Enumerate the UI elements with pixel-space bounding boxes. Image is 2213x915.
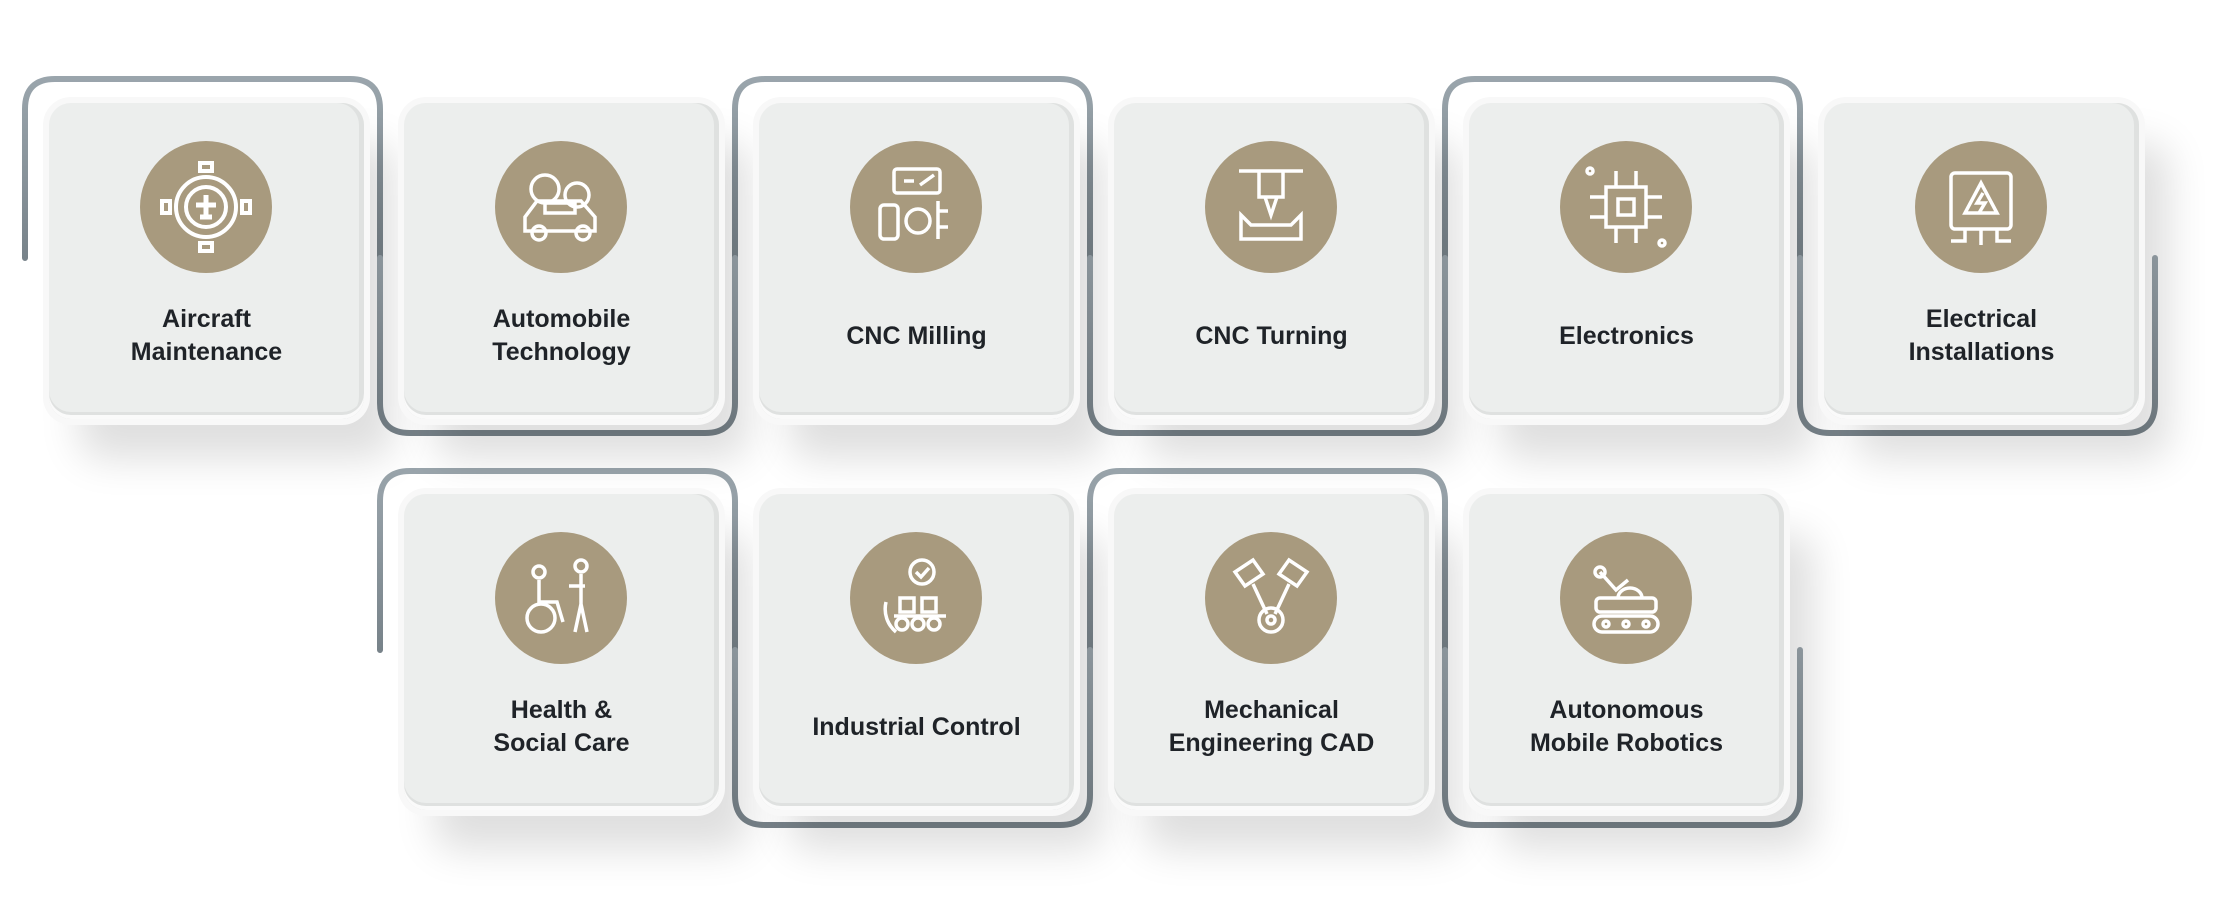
- icon: gear with check and boxes: [850, 532, 982, 664]
- label: Autonomous: [1549, 696, 1704, 724]
- label: Aircraft: [162, 305, 251, 333]
- icon: pistons: [1205, 532, 1337, 664]
- label: Electrical: [1926, 305, 2037, 333]
- label: CNC Turning: [1195, 322, 1348, 350]
- icon: electrical box: [1915, 141, 2047, 273]
- card: Mechanical Engineering CAD: [1114, 494, 1429, 810]
- icon: turning tool: [1205, 141, 1337, 273]
- label: Automobile: [493, 305, 630, 333]
- label: [492, 305, 631, 366]
- icon: milling: [850, 141, 982, 273]
- label: [1909, 305, 2054, 366]
- label: [1530, 696, 1723, 757]
- label: Maintenance: [131, 338, 282, 366]
- icon: chip: [1560, 141, 1692, 273]
- icon: wheelchair and carer: [495, 532, 627, 664]
- label: CNC Milling: [846, 322, 987, 350]
- card: Electronics: [1469, 103, 1784, 419]
- icon: robot arm on conveyor: [1560, 532, 1692, 664]
- icon: gear with plane: [140, 141, 272, 273]
- label: [1169, 696, 1374, 757]
- label: Electronics: [1559, 322, 1694, 350]
- card: Automobile Technology: [404, 103, 719, 419]
- label: Social Care: [493, 729, 630, 757]
- label: Health &: [511, 696, 612, 724]
- label: Engineering CAD: [1169, 729, 1374, 757]
- card: Aircraft Maintenance: [49, 103, 364, 419]
- card: Electrical Installations: [1824, 103, 2139, 419]
- icon: car with gears: [495, 141, 627, 273]
- label: Installations: [1909, 338, 2054, 366]
- card: CNC Turning: [1114, 103, 1429, 419]
- card: Industrial Control: [759, 494, 1074, 810]
- card: Health & Social Care: [404, 494, 719, 810]
- card: CNC Milling: [759, 103, 1074, 419]
- label: Technology: [492, 338, 631, 366]
- label: Industrial Control: [812, 713, 1021, 741]
- label: Mobile Robotics: [1530, 729, 1723, 757]
- label: Mechanical: [1204, 696, 1339, 724]
- card: Autonomous Mobile Robotics: [1469, 494, 1784, 810]
- label: [131, 305, 282, 366]
- label: [493, 696, 630, 757]
